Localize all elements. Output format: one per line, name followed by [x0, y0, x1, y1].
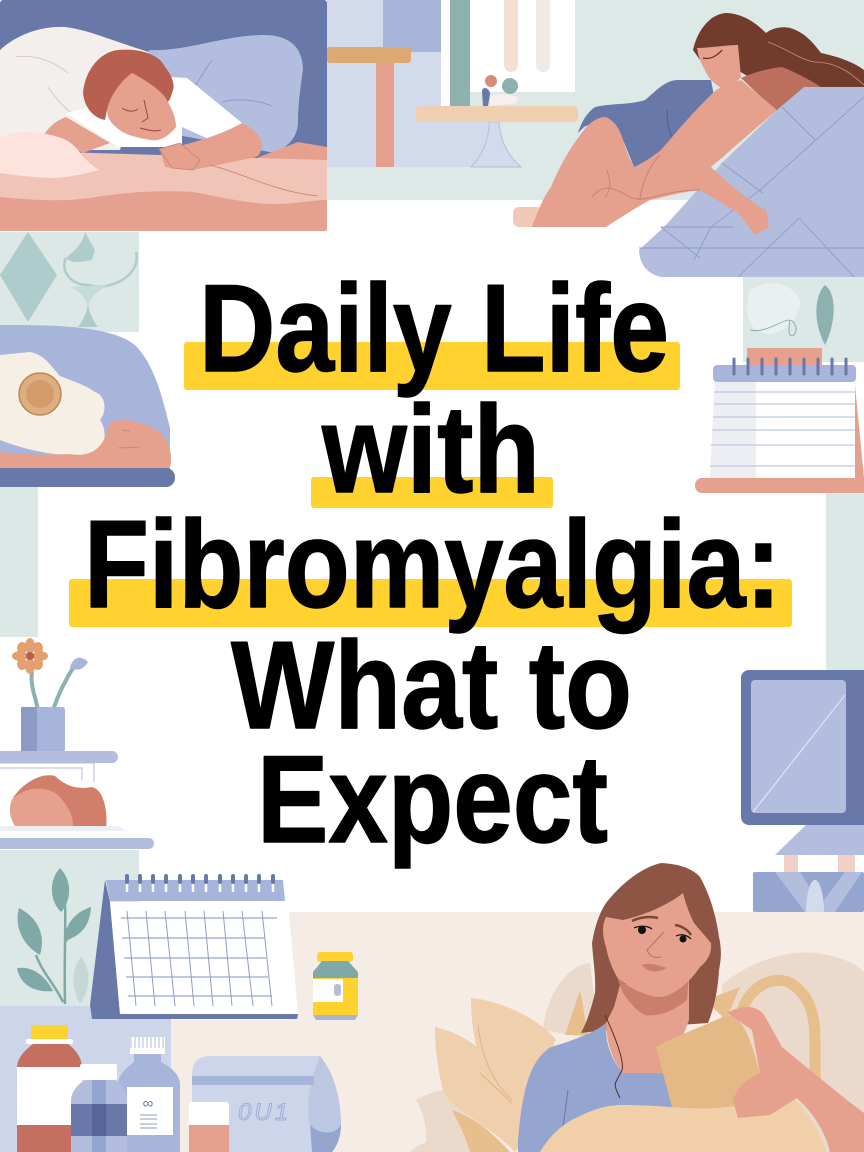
neck and chest [606, 973, 689, 1073]
hair [693, 13, 864, 95]
icon: diamond and hourglass wall decor [0, 232, 137, 327]
panel: woman resting with blanket [410, 863, 864, 1152]
window [441, 0, 575, 92]
shoulder shade [741, 67, 821, 112]
icon: blue tablet bottle with label: ∞ [143, 1095, 154, 1112]
title [84, 260, 781, 869]
arm and hand [727, 1007, 864, 1152]
shirt [518, 1023, 680, 1152]
body and arm [532, 80, 777, 235]
blanket [540, 1098, 826, 1152]
blankets [0, 132, 99, 178]
panel: notepad on shelf with plant [695, 277, 864, 493]
side table [327, 47, 411, 63]
pillow: blue [149, 35, 303, 153]
panel: woman leaning on cushion [513, 13, 864, 277]
title: Daily Life [199, 260, 669, 398]
title highlight bars [69, 342, 792, 627]
face [603, 893, 711, 997]
icon: salmon pill jar [189, 1102, 229, 1152]
hair [581, 863, 721, 1033]
small ornaments [482, 75, 518, 106]
panel: room with table and shelf [327, 0, 578, 167]
panel: person resting in bed [0, 0, 327, 231]
shelf with pedestal [441, 122, 488, 167]
decorative leaves [416, 1089, 490, 1152]
title: with [321, 381, 540, 519]
pillow: cream [0, 27, 149, 150]
icon: yellow supplement bottle [313, 952, 358, 1020]
panel: bed with heat pad [0, 325, 175, 487]
earphone cord [605, 1015, 622, 1098]
title: Expect [257, 731, 608, 869]
icon: wall calendar [90, 876, 298, 1019]
panel: left shelves with flower and keepsake [0, 638, 154, 849]
icon: blood pressure cuff [192, 1056, 341, 1152]
pillow held [656, 1015, 760, 1117]
icon: potted plant leaves [17, 868, 91, 1004]
notepad [710, 378, 855, 478]
icon: front pill bottle [71, 1064, 127, 1152]
swimsuit [578, 80, 725, 167]
title: What to [231, 617, 632, 755]
blanket base [0, 152, 327, 231]
sleeping person [44, 117, 110, 153]
icon: blood pressure cuff: 0U1 [238, 1099, 291, 1126]
face [697, 45, 741, 88]
cushion [639, 87, 864, 277]
background arches [722, 952, 864, 1152]
icon: red medicine bottle [17, 1025, 82, 1152]
icon: blue tablet bottle with label [118, 1037, 180, 1152]
panel: monitor and stand [741, 670, 864, 912]
